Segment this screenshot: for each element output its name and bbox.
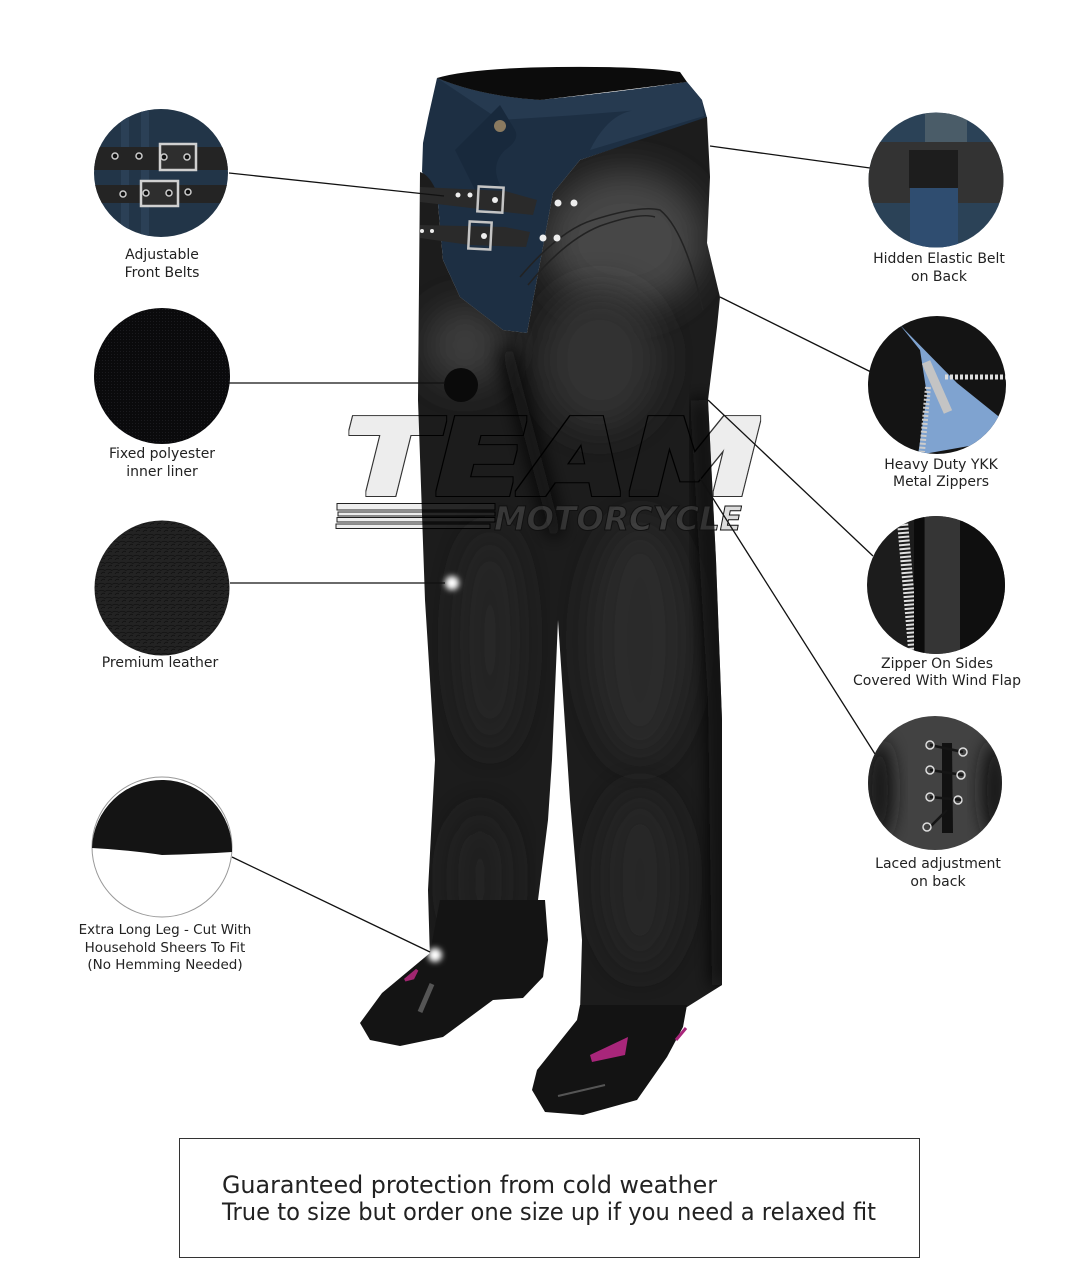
label: on Back bbox=[911, 269, 968, 285]
left boot bbox=[360, 900, 548, 1046]
label: inner liner bbox=[126, 464, 198, 480]
legs bbox=[418, 117, 722, 1012]
watermark: motorcycle wordmark: MOTORCYCLE bbox=[494, 499, 742, 538]
label: Adjustable bbox=[125, 247, 199, 263]
product photo: leather chaps bbox=[360, 67, 722, 1115]
connector lines bbox=[229, 146, 875, 952]
marker dots bbox=[444, 368, 478, 402]
label: Metal Zippers bbox=[893, 474, 989, 490]
detail: polyester liner bbox=[94, 308, 230, 480]
detail: adjustable front belts bbox=[90, 105, 232, 281]
label: Extra Long Leg - Cut With bbox=[79, 922, 251, 938]
detail: side zipper bbox=[853, 516, 1021, 689]
watermark overlay on legs: TEAM bbox=[345, 397, 761, 519]
right boot bbox=[532, 1005, 687, 1115]
label: on back bbox=[910, 874, 966, 890]
label: Zipper On Sides bbox=[881, 656, 993, 672]
detail: extra long leg bbox=[79, 777, 251, 973]
label: Household Sheers To Fit bbox=[85, 940, 245, 956]
watermark base: Team Motorcycle: TEAM bbox=[345, 397, 761, 519]
label: Hidden Elastic Belt bbox=[873, 251, 1005, 267]
label: Fixed polyester bbox=[109, 446, 215, 462]
detail: ykk zippers bbox=[868, 316, 1007, 490]
front belts bbox=[420, 186, 578, 250]
label: Laced adjustment bbox=[875, 856, 1001, 872]
waist opening bbox=[437, 67, 687, 100]
jeans button bbox=[494, 120, 506, 132]
stitching bbox=[520, 209, 703, 310]
watermark overlay on legs bbox=[418, 415, 713, 529]
callout box: True to size but order one size up if you need a relaxed fit bbox=[221, 1198, 876, 1226]
label: (No Hemming Needed) bbox=[87, 957, 243, 973]
label: Covered With Wind Flap bbox=[853, 673, 1021, 689]
callout box bbox=[180, 1138, 920, 1258]
jeans bbox=[422, 78, 707, 333]
label: Front Belts bbox=[125, 265, 199, 281]
label: Heavy Duty YKK bbox=[884, 457, 998, 473]
detail: hidden elastic belt bbox=[865, 112, 1007, 285]
detail: premium leather bbox=[94, 520, 230, 671]
label: Premium leather bbox=[102, 655, 219, 671]
callout box: Guaranteed protection from cold weather bbox=[222, 1171, 717, 1199]
detail: laced adjustment bbox=[866, 716, 1009, 890]
